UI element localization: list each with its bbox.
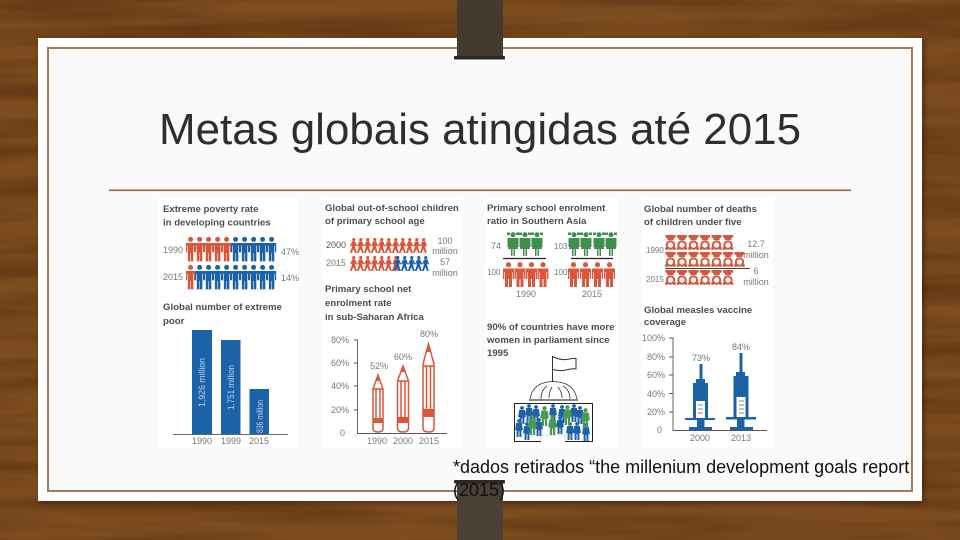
heading: deaths under five: Global number of deaths (644, 204, 757, 215)
chart: pencils (331, 329, 447, 446)
heading: measles coverage: Global measles vaccine (644, 305, 752, 316)
child deaths labels: million (743, 250, 769, 260)
title: Metas globais atingidas até 2015 (159, 106, 801, 154)
icon: parliament building (514, 356, 592, 442)
chart: pencils: 20% (331, 405, 349, 415)
bar chart: extreme poor: 836 million (255, 400, 265, 433)
footnote second line: (2015) (453, 480, 505, 500)
title rule (109, 190, 851, 191)
heading: net enrolment: enrolment rate (325, 298, 392, 309)
chart: syringes: 73% (692, 353, 710, 363)
panel: out-of-school and enrolment (322, 198, 463, 448)
southern asia labels: 100 (554, 268, 568, 277)
chart: syringes: 100% (642, 333, 665, 343)
bar chart: extreme poor: 1990 (192, 436, 212, 446)
chart: pencils: 2000 (393, 436, 413, 446)
child deaths labels: 12.7 (747, 239, 765, 249)
out-of-school labels: million (432, 246, 458, 256)
chart: syringes: 2013 (731, 433, 751, 443)
child deaths labels: 2015 (646, 275, 664, 284)
panel: southern asia and parliament (485, 198, 619, 448)
heading: out-of-school children: of primary school age (325, 216, 425, 227)
child deaths labels: 1990 (646, 246, 664, 255)
child deaths labels: million (743, 277, 769, 287)
southern asia labels: 2015 (582, 289, 602, 299)
heading: global number of extreme poor: poor (163, 316, 185, 327)
poverty rate labels: 2015 (163, 272, 183, 282)
top strap (454, 0, 505, 60)
bottom strap (454, 480, 505, 540)
bar chart: extreme poor: 1999 (221, 436, 241, 446)
pictogram: girls and boys (503, 232, 617, 287)
southern asia labels: 1990 (516, 289, 536, 299)
chart: syringes: 40% (647, 389, 665, 399)
panel: extreme poverty (157, 198, 299, 448)
chart: pencils: 80% (331, 335, 349, 345)
chart: pencils: 0 (340, 428, 345, 438)
out-of-school labels: 57 (440, 257, 450, 267)
slide card (38, 38, 922, 501)
heading: global number of extreme poor: Global number of extreme (163, 302, 282, 313)
chart: pencils: 80% (420, 329, 438, 339)
chart: pencils: 40% (331, 381, 349, 391)
heading: measles coverage: coverage (644, 317, 686, 328)
poverty rate labels: 14% (281, 273, 299, 283)
bar chart: extreme poor (173, 330, 288, 446)
pictogram: out-of-school runners (350, 238, 429, 271)
chart: syringes: 60% (647, 370, 665, 380)
poverty rate labels: 1990 (163, 245, 183, 255)
pictogram: child deaths (665, 235, 750, 285)
child deaths labels: 6 (753, 266, 759, 276)
chart: syringes: 80% (647, 352, 665, 362)
out-of-school labels: million (432, 268, 458, 278)
heading: women in parliament: 1995 (487, 348, 509, 359)
chart: pencils: 2015 (419, 436, 439, 446)
out-of-school labels: 100 (437, 236, 453, 246)
chart: syringes: 2000 (690, 433, 710, 443)
heading: extreme poverty rate: Extreme poverty rate (163, 204, 258, 215)
poverty rate labels (163, 245, 299, 283)
chart: pencils: 52% (370, 361, 388, 371)
southern asia labels: 74 (491, 241, 501, 251)
heading: women in parliament: 90% of countries have more (487, 322, 614, 333)
chart: pencils: 60% (331, 358, 349, 368)
child deaths labels (646, 239, 769, 287)
out-of-school labels: 2000 (326, 240, 346, 250)
heading: women in parliament: women in parliament since (486, 335, 610, 346)
southern asia labels: 103 (554, 242, 568, 251)
panel: child deaths and measles (641, 198, 773, 448)
poverty rate labels: 47% (281, 247, 299, 257)
chart: syringes: 0 (657, 425, 662, 435)
heading: southern asia enrolment: Primary school enrolment (487, 203, 605, 214)
footnote: *dados retirados “the millenium development goals report (453, 457, 909, 477)
out-of-school labels: 2015 (326, 258, 346, 268)
chart: syringes (642, 333, 767, 443)
southern asia labels (487, 241, 602, 299)
bar chart: extreme poor: 2015 (249, 436, 269, 446)
heading: southern asia enrolment: ratio in Southern Asia (487, 216, 587, 227)
heading: deaths under five: of children under five (644, 217, 742, 228)
out-of-school labels (326, 236, 458, 278)
chart: pencils: 60% (394, 352, 412, 362)
southern asia labels: 100 (487, 268, 501, 277)
chart: syringes: 20% (647, 407, 665, 417)
pictogram: poverty rate people (186, 237, 276, 289)
chart: syringes: 84% (732, 342, 750, 352)
bar chart: extreme poor: 1,751 million (226, 365, 236, 410)
heading: out-of-school children: Global out-of-school children (325, 203, 459, 214)
bar chart: extreme poor: 1,926 million (197, 358, 207, 407)
heading: extreme poverty rate: in developing countries (163, 217, 271, 228)
chart: pencils: 1990 (367, 436, 387, 446)
heading: net enrolment: in sub-Saharan Africa (325, 312, 424, 323)
heading: net enrolment: Primary school net (325, 284, 411, 295)
